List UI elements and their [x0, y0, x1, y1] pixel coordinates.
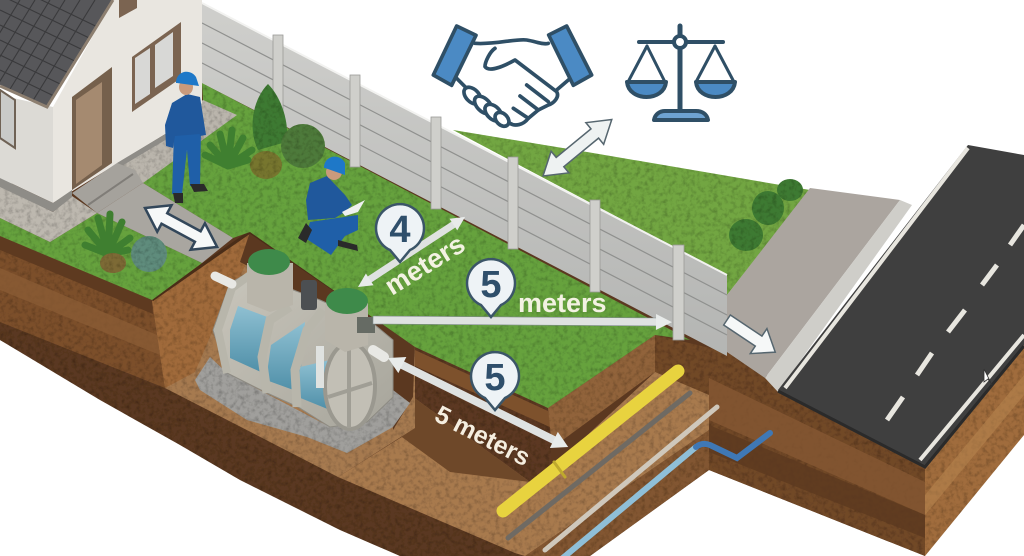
- arrow head: [656, 314, 672, 330]
- soil: front-left upper layer: [0, 236, 165, 388]
- number bubble 5: [471, 352, 519, 410]
- upper window: [119, 0, 137, 18]
- soil: front-left lower layer: [0, 300, 530, 556]
- number 4: 4: [389, 209, 411, 251]
- tank rib 3: [295, 310, 323, 407]
- side window: [0, 90, 15, 148]
- icon: scales of justice: [627, 26, 735, 120]
- clipboard: [342, 200, 365, 216]
- sidewalk: [727, 188, 900, 378]
- small brown shrub: [250, 151, 282, 179]
- soil: front-left light band: [0, 268, 160, 355]
- ground underlay: [0, 83, 925, 556]
- tank rib 2: [262, 307, 290, 393]
- pit back wall: [240, 232, 415, 430]
- left cuff: [433, 26, 476, 85]
- blue tank window 1: [230, 306, 270, 373]
- soil: side face pale band: [925, 375, 1024, 515]
- roof: [0, 0, 113, 107]
- arrow head near tank: [354, 273, 374, 293]
- number bubble 5: [467, 259, 515, 317]
- window on front wall: [132, 22, 181, 112]
- tank end cap: [325, 343, 375, 429]
- pit rim: [152, 232, 415, 345]
- tank excavation pit: [152, 232, 415, 477]
- riser 1: [247, 263, 293, 312]
- conical shrub: [253, 84, 287, 150]
- front fern: [85, 214, 130, 254]
- blue tank window 3: [298, 360, 330, 410]
- door leaf: [76, 82, 102, 184]
- fingers: [461, 84, 484, 107]
- gravel strip along the right wall: [120, 100, 237, 183]
- legs: [172, 130, 201, 194]
- face: [326, 164, 342, 180]
- soil: wall under the lawn, shaded: [413, 347, 552, 482]
- soil: wall under the lawn, lit: [548, 335, 655, 448]
- pit left wall: [152, 232, 253, 388]
- arrow head near fence: [450, 211, 469, 230]
- yellow gas pipe: [503, 371, 678, 511]
- fern by the wall: [205, 130, 252, 166]
- boots: [173, 184, 208, 203]
- text 5 meters: 5 meters: [430, 400, 535, 472]
- roof tile lines: [0, 0, 96, 100]
- end cap ribs: [328, 345, 372, 428]
- road edge lines: [785, 148, 1024, 460]
- soil: lower trench floor: [338, 372, 709, 556]
- shrubs and plants: [85, 84, 803, 273]
- white pipe: [545, 407, 717, 550]
- right cuff: [549, 26, 592, 85]
- hard hat: [324, 157, 345, 175]
- concrete boundary fence: [202, 3, 727, 356]
- beam: [639, 40, 723, 44]
- fence panel seams: [202, 23, 727, 335]
- tank left rib: [218, 275, 250, 373]
- round shrub: [281, 124, 325, 168]
- base: [654, 111, 708, 120]
- white arrow: to the road: [719, 308, 784, 365]
- inlet stub: [215, 276, 232, 284]
- far shrub, middle: [752, 191, 784, 225]
- left strings: [628, 46, 665, 82]
- fence posts: [273, 35, 684, 340]
- soil: wall top stripe: [415, 350, 552, 428]
- mouse cursor: [984, 369, 992, 385]
- label: 4 meters: [376, 204, 470, 301]
- soil: front-left top band: [0, 236, 153, 314]
- distance tape: 5 meters to pipes: [384, 350, 572, 455]
- legs: [305, 215, 358, 255]
- tape line: [373, 316, 658, 326]
- tape line: [397, 360, 560, 446]
- number 5: 5: [480, 264, 502, 306]
- front wall plinth: [117, 133, 167, 167]
- road bottom edge: [778, 346, 1024, 467]
- house: [0, 0, 202, 213]
- number 5: 5: [484, 357, 506, 399]
- buried utility pipes: [503, 371, 770, 556]
- concrete path: [97, 183, 233, 263]
- left pan: [627, 82, 666, 97]
- front wall: [53, 0, 202, 203]
- road curb: [765, 200, 912, 392]
- entrance steps: [72, 163, 143, 213]
- distance tape: 5 meters to fence: [373, 312, 672, 330]
- soil: right block front face: [655, 335, 925, 556]
- septic tank: [213, 249, 393, 429]
- green lid 2: [326, 288, 368, 314]
- asphalt surface: [778, 145, 1024, 466]
- lawn in front of the house: [0, 213, 202, 300]
- torso and arms: [306, 176, 352, 220]
- soil: right block light band: [709, 378, 925, 515]
- ground block: soil cross-section: [0, 236, 1024, 556]
- right strings: [696, 46, 734, 82]
- hands outline: [457, 40, 568, 125]
- boots: [298, 223, 358, 251]
- step edge: [88, 174, 133, 205]
- text meters: meters: [379, 229, 470, 301]
- vent pipe: [316, 346, 324, 388]
- icon: handshake: [433, 26, 592, 129]
- label: 5 meters diagonal: [430, 352, 535, 472]
- road: [778, 145, 1024, 467]
- hard hat: [176, 72, 199, 86]
- yellow pipe collar: [554, 462, 565, 477]
- post: [678, 26, 682, 112]
- soil: right block dark band: [709, 425, 925, 538]
- far shrub, small: [777, 179, 803, 201]
- blue-green shrub: [131, 236, 167, 272]
- green lid 1: [248, 249, 290, 275]
- control box: [357, 317, 375, 333]
- arrow head near pipes: [550, 432, 572, 455]
- main lawn: [143, 83, 690, 408]
- blue tank window 2: [266, 322, 305, 392]
- face: [179, 79, 193, 95]
- wall plinth: [0, 178, 72, 212]
- white arrow: path to house: [138, 195, 224, 260]
- pit floor: [152, 232, 415, 477]
- blue water pipe: [558, 447, 696, 556]
- door: [72, 67, 112, 190]
- blue bend: [696, 433, 770, 458]
- fence top edge: [202, 3, 727, 275]
- white arrow: fence to legal icons: [534, 109, 621, 187]
- right pan: [696, 82, 735, 97]
- arrow head near tank: [384, 350, 406, 373]
- lawn behind the fence: [453, 130, 810, 295]
- soil: right block side face: [925, 345, 1024, 556]
- tape line: [364, 219, 459, 284]
- front dry shrub: [100, 253, 126, 273]
- side wall: [0, 95, 53, 203]
- roof fascia: [0, 0, 113, 107]
- gravel strip beside the house: [0, 186, 97, 242]
- label: 5 meters horizontal: [467, 259, 607, 318]
- soil: pipe trench ledge: [525, 430, 709, 556]
- soil: shadow on the trench floor: [395, 397, 530, 482]
- outlet stub: [373, 350, 384, 357]
- fence panels: [202, 3, 727, 356]
- riser 2: [325, 303, 368, 352]
- tank body: [213, 273, 393, 427]
- window panes: [135, 32, 173, 104]
- number bubble 4: [376, 204, 424, 262]
- grey pipe: [508, 393, 690, 538]
- torso and arms: [165, 94, 206, 148]
- worker standing: [165, 72, 208, 203]
- pivot: [674, 36, 686, 48]
- distance tape: 4 meters: [354, 211, 469, 293]
- centre dashes: [887, 225, 1024, 420]
- text meters: meters: [518, 288, 607, 318]
- worker kneeling with clipboard: [298, 157, 365, 255]
- far shrub, near: [729, 219, 763, 251]
- knuckle lines: [513, 85, 548, 118]
- gravel bed: [195, 357, 410, 453]
- valve: [301, 280, 317, 310]
